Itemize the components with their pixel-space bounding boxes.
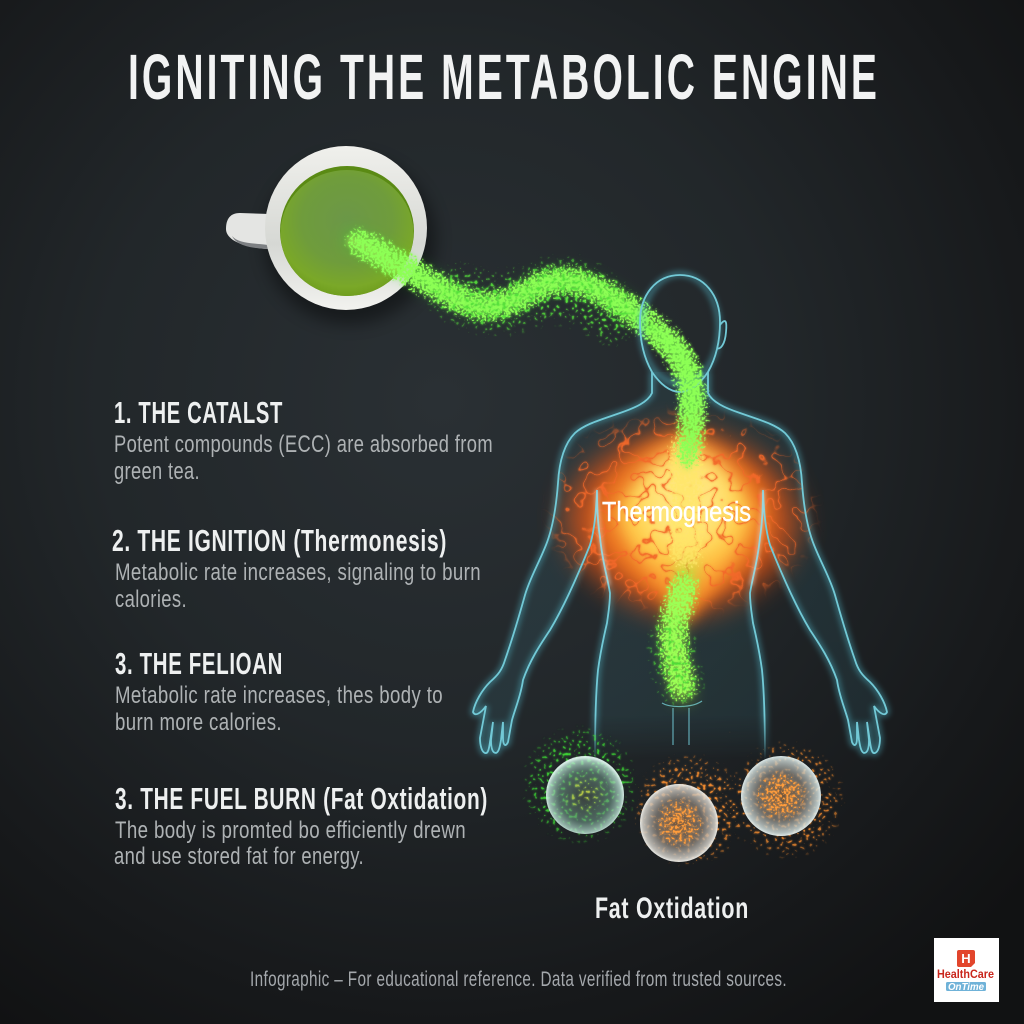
text block: step 1: green tea. xyxy=(114,458,200,485)
chart: energy stream through body xyxy=(648,325,720,720)
logo: HealthCare OnTime: HealthCare xyxy=(937,967,994,981)
label: fat oxidation: Fat Oxtidation xyxy=(595,892,749,925)
icon: fat cell 1 xyxy=(546,756,624,834)
figure: translucent human body xyxy=(473,274,887,760)
chart: fat cell particle clouds xyxy=(504,709,862,884)
text block: step 3: 3. THE FELIOAN xyxy=(115,646,283,681)
body outline xyxy=(473,275,887,760)
text block: step 3 xyxy=(115,646,443,736)
armpit highlights xyxy=(597,490,763,585)
text block: step 2: calories. xyxy=(115,586,187,613)
text block: step 2: 2. THE IGNITION (Thermonesis) xyxy=(112,523,447,558)
body glow outline xyxy=(473,274,887,760)
text block: step 1: 1. THE CATALST xyxy=(114,395,283,430)
text block: step 2 xyxy=(112,523,481,613)
logo: HealthCare OnTime: H xyxy=(961,951,971,966)
icon: fat cell 2 xyxy=(640,784,718,862)
label: thermogenesis: Thermognesis xyxy=(602,496,751,527)
thermogenesis glow xyxy=(557,420,807,625)
icon: green tea cup xyxy=(226,146,436,324)
text block: step 1 xyxy=(114,395,493,485)
icon: fat cell 3 xyxy=(741,756,821,836)
text block: step 1: Potent compounds (ECC) are absorbed from xyxy=(114,431,493,458)
text block: step 2: Metabolic rate increases, signaling to burn xyxy=(115,559,481,586)
text block: step 3: Metabolic rate increases, thes body to xyxy=(115,682,443,709)
chart: tea particle stream xyxy=(345,238,693,470)
text block: step 4: The body is promted bo efficiently drewn xyxy=(115,817,466,844)
logo: HealthCare OnTime: OnTime xyxy=(948,982,984,993)
footer note: Infographic – For educational reference. Data verified from trusted sources. xyxy=(250,968,787,991)
text block: step 4: 3. THE FUEL BURN (Fat Oxtidation) xyxy=(115,781,488,816)
logo: HealthCare OnTime xyxy=(934,938,999,1002)
text block: step 4 xyxy=(114,781,488,870)
text block: step 4: and use stored fat for energy. xyxy=(114,843,364,870)
body silhouette xyxy=(473,372,887,760)
text block: step 3: burn more calories. xyxy=(115,709,282,736)
